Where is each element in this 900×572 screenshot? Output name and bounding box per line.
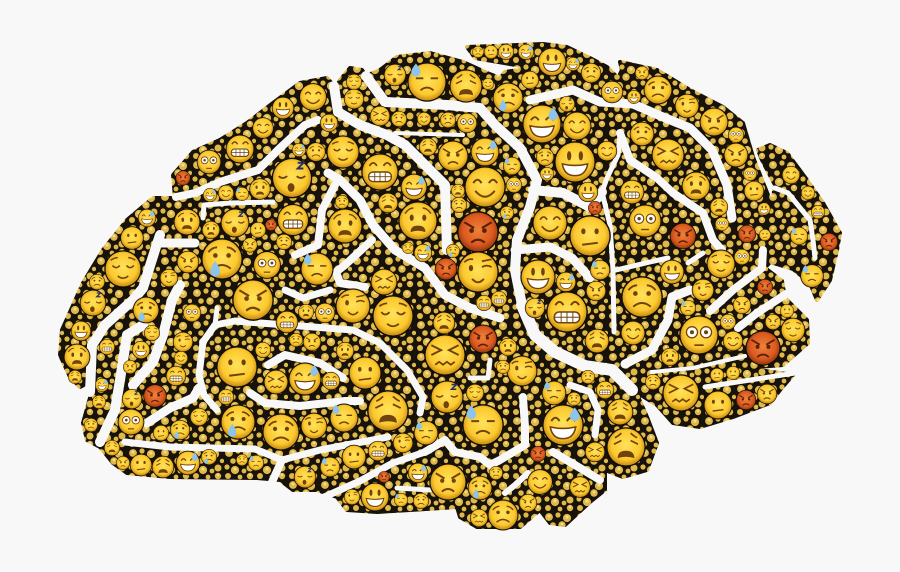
emoji: centre-top faces — [335, 44, 601, 311]
white sulci channels between gyri — [90, 76, 815, 498]
emoji: left lobe faces — [64, 83, 399, 478]
emoji: middle and lower faces — [153, 208, 646, 531]
brain silhouette — [60, 44, 840, 527]
emoji: right lobe faces — [520, 66, 838, 419]
